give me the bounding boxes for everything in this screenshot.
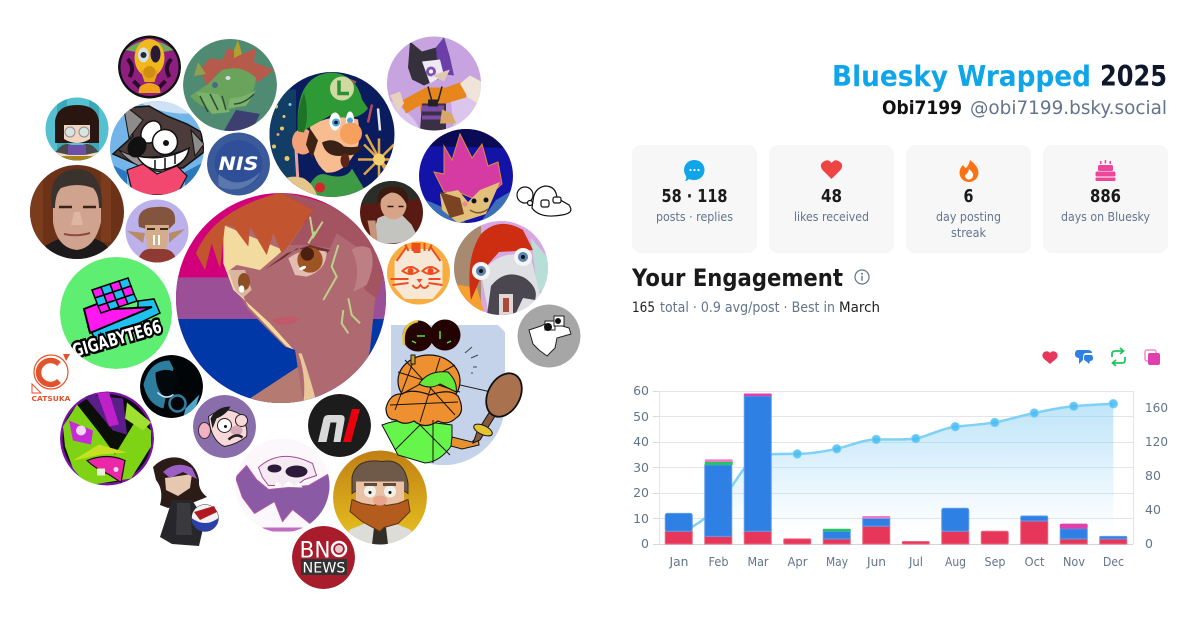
panel: day posting streak: streak	[951, 225, 987, 240]
panel: likes received: likes received	[794, 209, 869, 224]
avatar: blue gas mask	[140, 355, 203, 418]
title: 2025	[1100, 60, 1167, 93]
panel: days on Bluesky	[1043, 145, 1168, 253]
avatar: green monster with tongue	[60, 392, 154, 486]
panel: day posting streak: 6	[964, 186, 974, 207]
icon: flame	[960, 160, 979, 182]
right axis labels: 120	[1145, 434, 1168, 449]
right axis labels: 80	[1145, 468, 1161, 483]
left axis labels: 30	[633, 460, 649, 475]
month labels: Feb	[708, 554, 729, 569]
month labels: Apr	[788, 554, 808, 569]
avatar: Catsuka logo	[32, 354, 71, 403]
panel: likes received	[769, 145, 894, 253]
panel: likes received: 48	[821, 186, 842, 207]
avatar: pink-haired monkey character	[419, 129, 513, 223]
avatar: man portrait	[30, 165, 124, 259]
icon: birthday cake	[1096, 160, 1116, 181]
panel: days on Bluesky: days on Bluesky	[1061, 209, 1151, 224]
avatar: grinning wolf	[110, 101, 204, 195]
month labels: Aug	[945, 554, 966, 569]
month labels: Dec	[1103, 554, 1124, 569]
chart legend icons	[1042, 348, 1160, 366]
heading: your engagement: Your Engagement	[631, 264, 843, 292]
panel: days on Bluesky: 886	[1090, 186, 1121, 207]
avatar: bearded man cartoon	[333, 450, 427, 544]
icon: quotes	[1145, 350, 1160, 365]
avatar: grey ghost doodle	[518, 304, 580, 368]
avatar: goth girl with purple hair	[153, 457, 218, 546]
avatar: NIS logo	[207, 132, 270, 196]
left axis labels: 50	[633, 409, 649, 424]
icon: speech bubble	[684, 160, 705, 181]
month labels: Jun	[866, 554, 886, 569]
avatar: BNO News logo: NEWS	[302, 560, 346, 576]
panel: posts and replies: 58 · 118	[662, 186, 728, 207]
left axis labels: 20	[633, 485, 649, 500]
right axis labels: 160	[1145, 400, 1168, 415]
avatar: BNO News logo	[292, 526, 355, 589]
cumulative area	[679, 404, 1113, 544]
icon: likes	[1042, 351, 1058, 364]
avatar: gold trophy mask	[118, 36, 181, 98]
month labels: Nov	[1063, 554, 1086, 569]
month labels: Mar	[748, 554, 769, 569]
title: Bluesky Wrapped	[832, 60, 1091, 93]
left axis labels: 40	[633, 434, 649, 449]
icon: reposts	[1112, 348, 1125, 366]
avatar: Luigi with fireworks	[266, 72, 395, 198]
icon: replies	[1075, 350, 1093, 364]
left axis labels: 0	[641, 536, 649, 551]
avatar: Catsuka logo: CATSUKA	[32, 395, 71, 403]
avatar: orange creature with wooden spoon	[382, 320, 529, 465]
right axis labels	[1145, 400, 1168, 551]
avatar: orange cat face	[386, 241, 450, 305]
stacked bars	[665, 394, 1127, 544]
panel: day posting streak	[906, 145, 1031, 253]
avatar: Gigabyte66 logo	[60, 257, 172, 369]
avatar: purple skull creature	[236, 456, 330, 532]
month labels: May	[826, 554, 849, 569]
combined bar and line chart	[633, 383, 1168, 569]
avatar: girl with glasses	[45, 97, 109, 162]
avatar: NIS logo: NIS	[218, 153, 258, 175]
profile name and handle: @obi7199.bsky.social	[970, 97, 1167, 119]
cumulative line	[679, 400, 1117, 534]
month labels: Jan	[669, 554, 688, 569]
engagement summary: 165	[632, 300, 655, 316]
avatar: BNO News logo: BN	[300, 538, 330, 564]
avatar: bi flag anime character	[176, 193, 386, 403]
avatar: toddler photo	[360, 180, 424, 244]
right axis labels: 40	[1145, 502, 1161, 517]
panel: posts and replies: posts · replies	[656, 209, 733, 224]
icon: heart	[821, 160, 842, 179]
month labels: Sep	[984, 554, 1006, 569]
left axis labels: 60	[633, 383, 649, 398]
avatar: horned brown-haired character	[125, 199, 189, 263]
avatar: purple furry character	[387, 36, 481, 130]
panel: posts and replies	[632, 145, 757, 253]
left axis labels: 10	[633, 511, 649, 526]
left axis labels	[633, 383, 649, 551]
avatar: rabbid with red cap	[454, 221, 548, 315]
right axis labels: 0	[1145, 536, 1153, 551]
profile name and handle: Obi7199	[882, 97, 962, 119]
engagement summary: total · 0.9 avg/post · Best in	[660, 300, 835, 316]
month labels: Jul	[908, 554, 923, 569]
icon: info	[855, 270, 869, 284]
profile name and handle	[882, 97, 1167, 119]
avatar: Gigabyte66 logo: GIGABYTE66	[70, 316, 164, 362]
month labels	[669, 554, 1124, 569]
engagement summary: March	[839, 300, 880, 316]
avatar: pig-like bespectacled man	[193, 395, 256, 458]
avatar: nl logo	[308, 394, 371, 457]
panel: day posting streak: day posting	[936, 209, 1001, 224]
avatar cluster	[30, 36, 580, 589]
avatar: green troll	[183, 37, 277, 134]
avatar: outline doodle	[517, 186, 571, 216]
month labels: Oct	[1024, 554, 1045, 569]
